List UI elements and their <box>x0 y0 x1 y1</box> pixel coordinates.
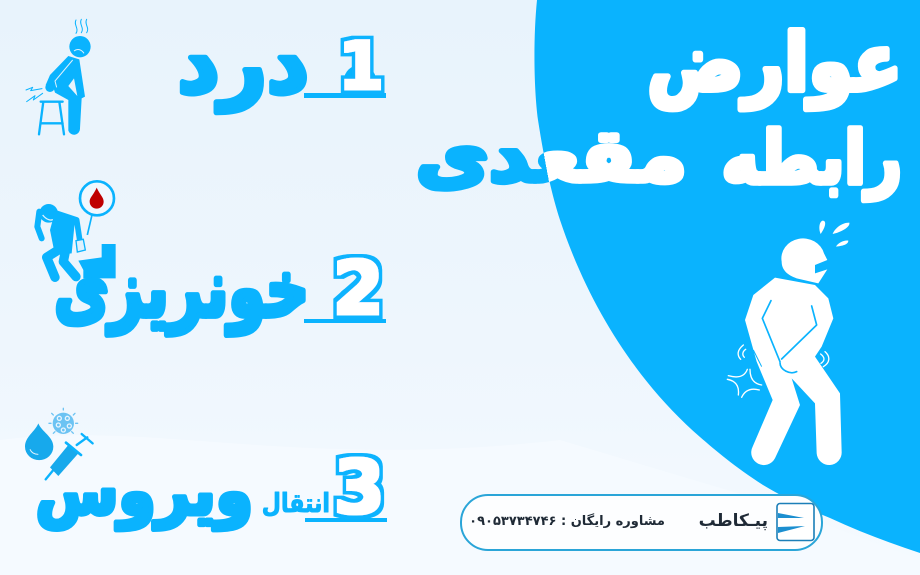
number 1 <box>304 28 386 105</box>
item 2: bleeding <box>37 181 386 335</box>
number 2: 2 <box>332 246 384 332</box>
icon: logo <box>777 504 814 540</box>
label: bleeding: خونریزی <box>54 244 309 335</box>
title <box>416 16 902 201</box>
number 1: 1 <box>338 28 384 105</box>
title: مقعدی <box>416 113 687 198</box>
item 3: virus transmission <box>25 408 387 531</box>
label: transmission: انتقال <box>262 488 330 518</box>
blue circular panel <box>534 0 920 553</box>
brand name: پیـکاطب <box>699 511 768 531</box>
number 2 <box>304 246 386 332</box>
icon: man with blood spot on toilet <box>37 181 116 278</box>
title: رابطه <box>722 116 902 201</box>
consultation phone number: مشاوره رایگان : ۰۹۰۵۳۷۳۴۷۴۶ <box>469 513 665 529</box>
icon: man with back pain on stool <box>26 19 91 135</box>
figure: man in pain <box>727 221 849 465</box>
label: virus: ویروس <box>36 454 253 530</box>
item 1: pain <box>26 14 386 135</box>
title: عوارض <box>647 16 902 110</box>
label: pain: درد <box>178 14 309 112</box>
contact badge <box>461 495 822 550</box>
number 3 <box>305 445 387 531</box>
number 3: 3 <box>334 445 385 531</box>
icon: drop, virus and syringe <box>25 408 93 479</box>
